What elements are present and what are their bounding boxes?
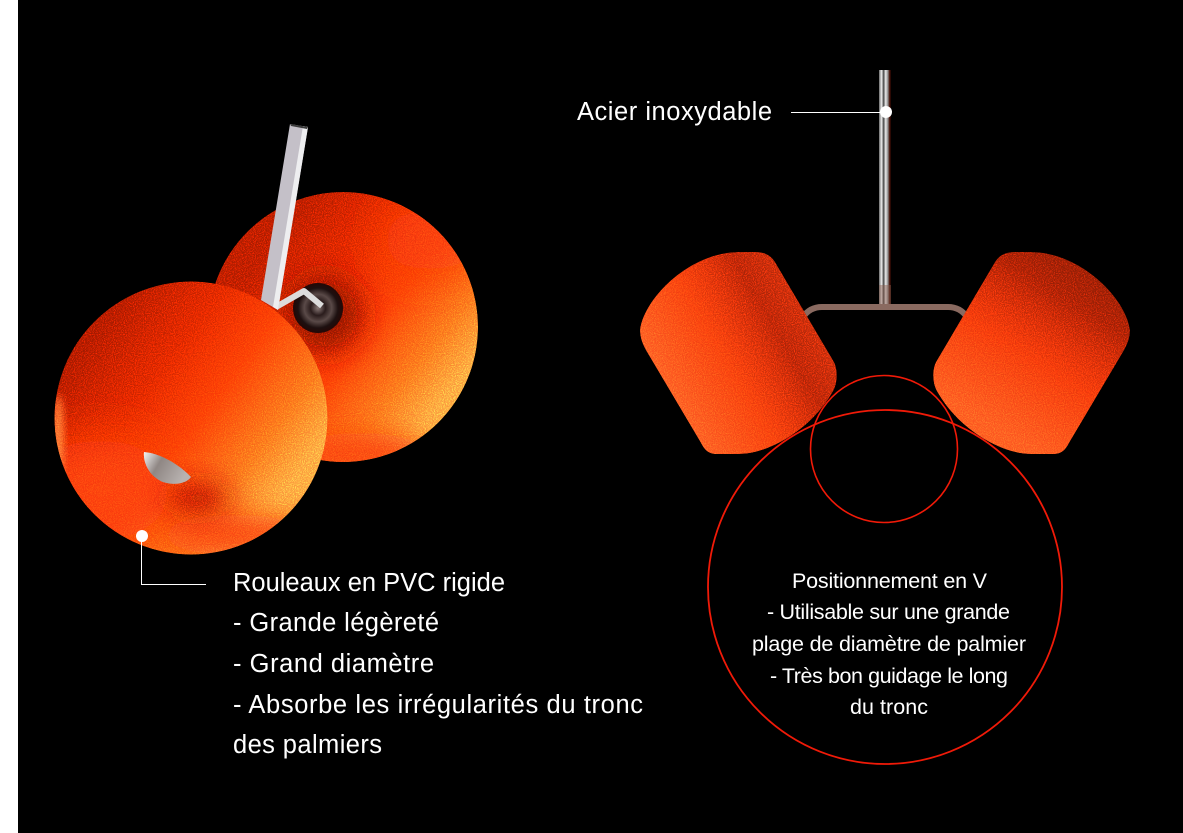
feature list: des palmiers [233,731,382,759]
feature list: Rouleaux en PVC rigide [233,569,505,597]
V positioning text: Positionnement en V [792,569,988,593]
V positioning text: plage de diamètre de palmier [752,632,1026,656]
stainless steel stem [879,70,891,306]
horizontal crossbar [803,307,967,317]
feature list [233,569,643,759]
label: Acier inoxydable [577,98,772,126]
feature list: - Absorbe les irrégularités du tronc [233,691,643,719]
V positioning text: - Utilisable sur une grande [767,600,1010,624]
large red circle: V positioning callout [708,410,1062,764]
bent axle [276,291,322,307]
left roller [640,252,837,454]
leader dot [136,530,148,542]
leader line [142,536,206,584]
small red circle: palm trunk minimum [810,376,958,522]
back roller hub hole [293,283,343,333]
feature list: - Grande légèreté [233,609,439,637]
product view: front elevation [640,70,1130,454]
leader dot [880,106,892,118]
back roller sphere [215,192,478,462]
V positioning text: - Très bon guidage le long [770,664,1008,688]
front roller sphere [54,282,328,554]
white left margin strip [0,0,18,833]
callout: PVC rollers [136,530,643,759]
callout: stainless steel [577,98,892,126]
product view: rollers seen in perspective [30,124,490,560]
leader line [791,112,886,114]
V positioning text [752,569,1026,719]
square steel rod [261,124,308,310]
right roller [933,252,1130,454]
feature list: - Grand diamètre [233,650,434,678]
front roller hub hole [144,452,191,484]
V positioning text: du tronc [850,695,928,719]
